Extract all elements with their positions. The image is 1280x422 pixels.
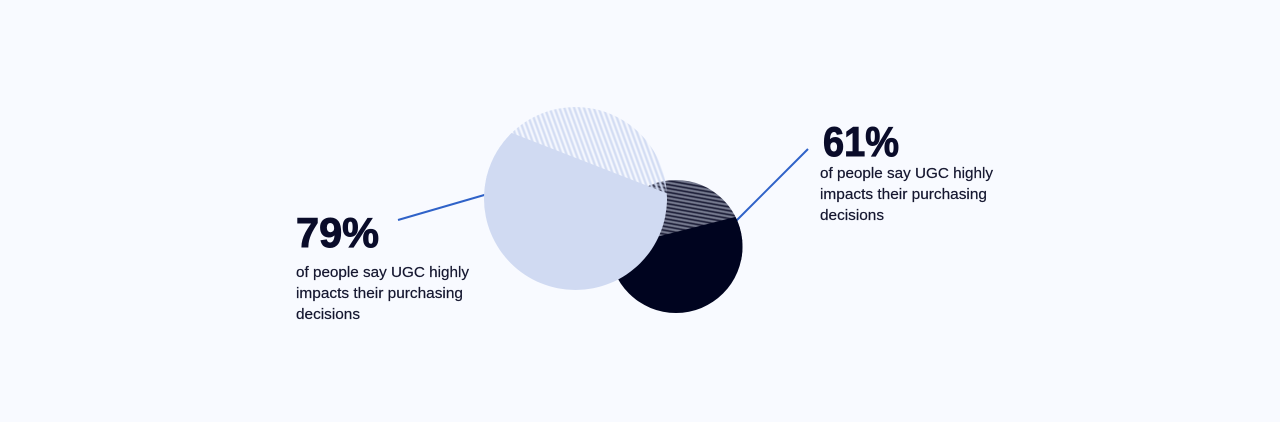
small pie hatched segment [648, 180, 742, 260]
number 79%: 79% [296, 209, 379, 256]
description: of people say UGC highly [820, 165, 994, 182]
large pie hatched segment [484, 107, 667, 210]
connector line: right [736, 149, 808, 221]
description: of people say UGC highly [296, 264, 470, 281]
large pie chart: 79% [484, 107, 667, 290]
large pie solid segment [484, 133, 667, 290]
stat: 61% [820, 118, 994, 224]
infographic canvas [296, 107, 994, 320]
small pie chart: 61% [618, 180, 742, 313]
description [820, 165, 994, 224]
description: decisions [820, 207, 884, 224]
stat: 79% [296, 209, 470, 323]
description [296, 264, 470, 323]
description: impacts their purchasing [820, 186, 987, 203]
small pie solid segment [618, 216, 742, 313]
description: impacts their purchasing [296, 285, 463, 302]
number 61%: 61% [823, 118, 899, 165]
description: decisions [296, 306, 360, 323]
connector line: left [398, 194, 486, 220]
